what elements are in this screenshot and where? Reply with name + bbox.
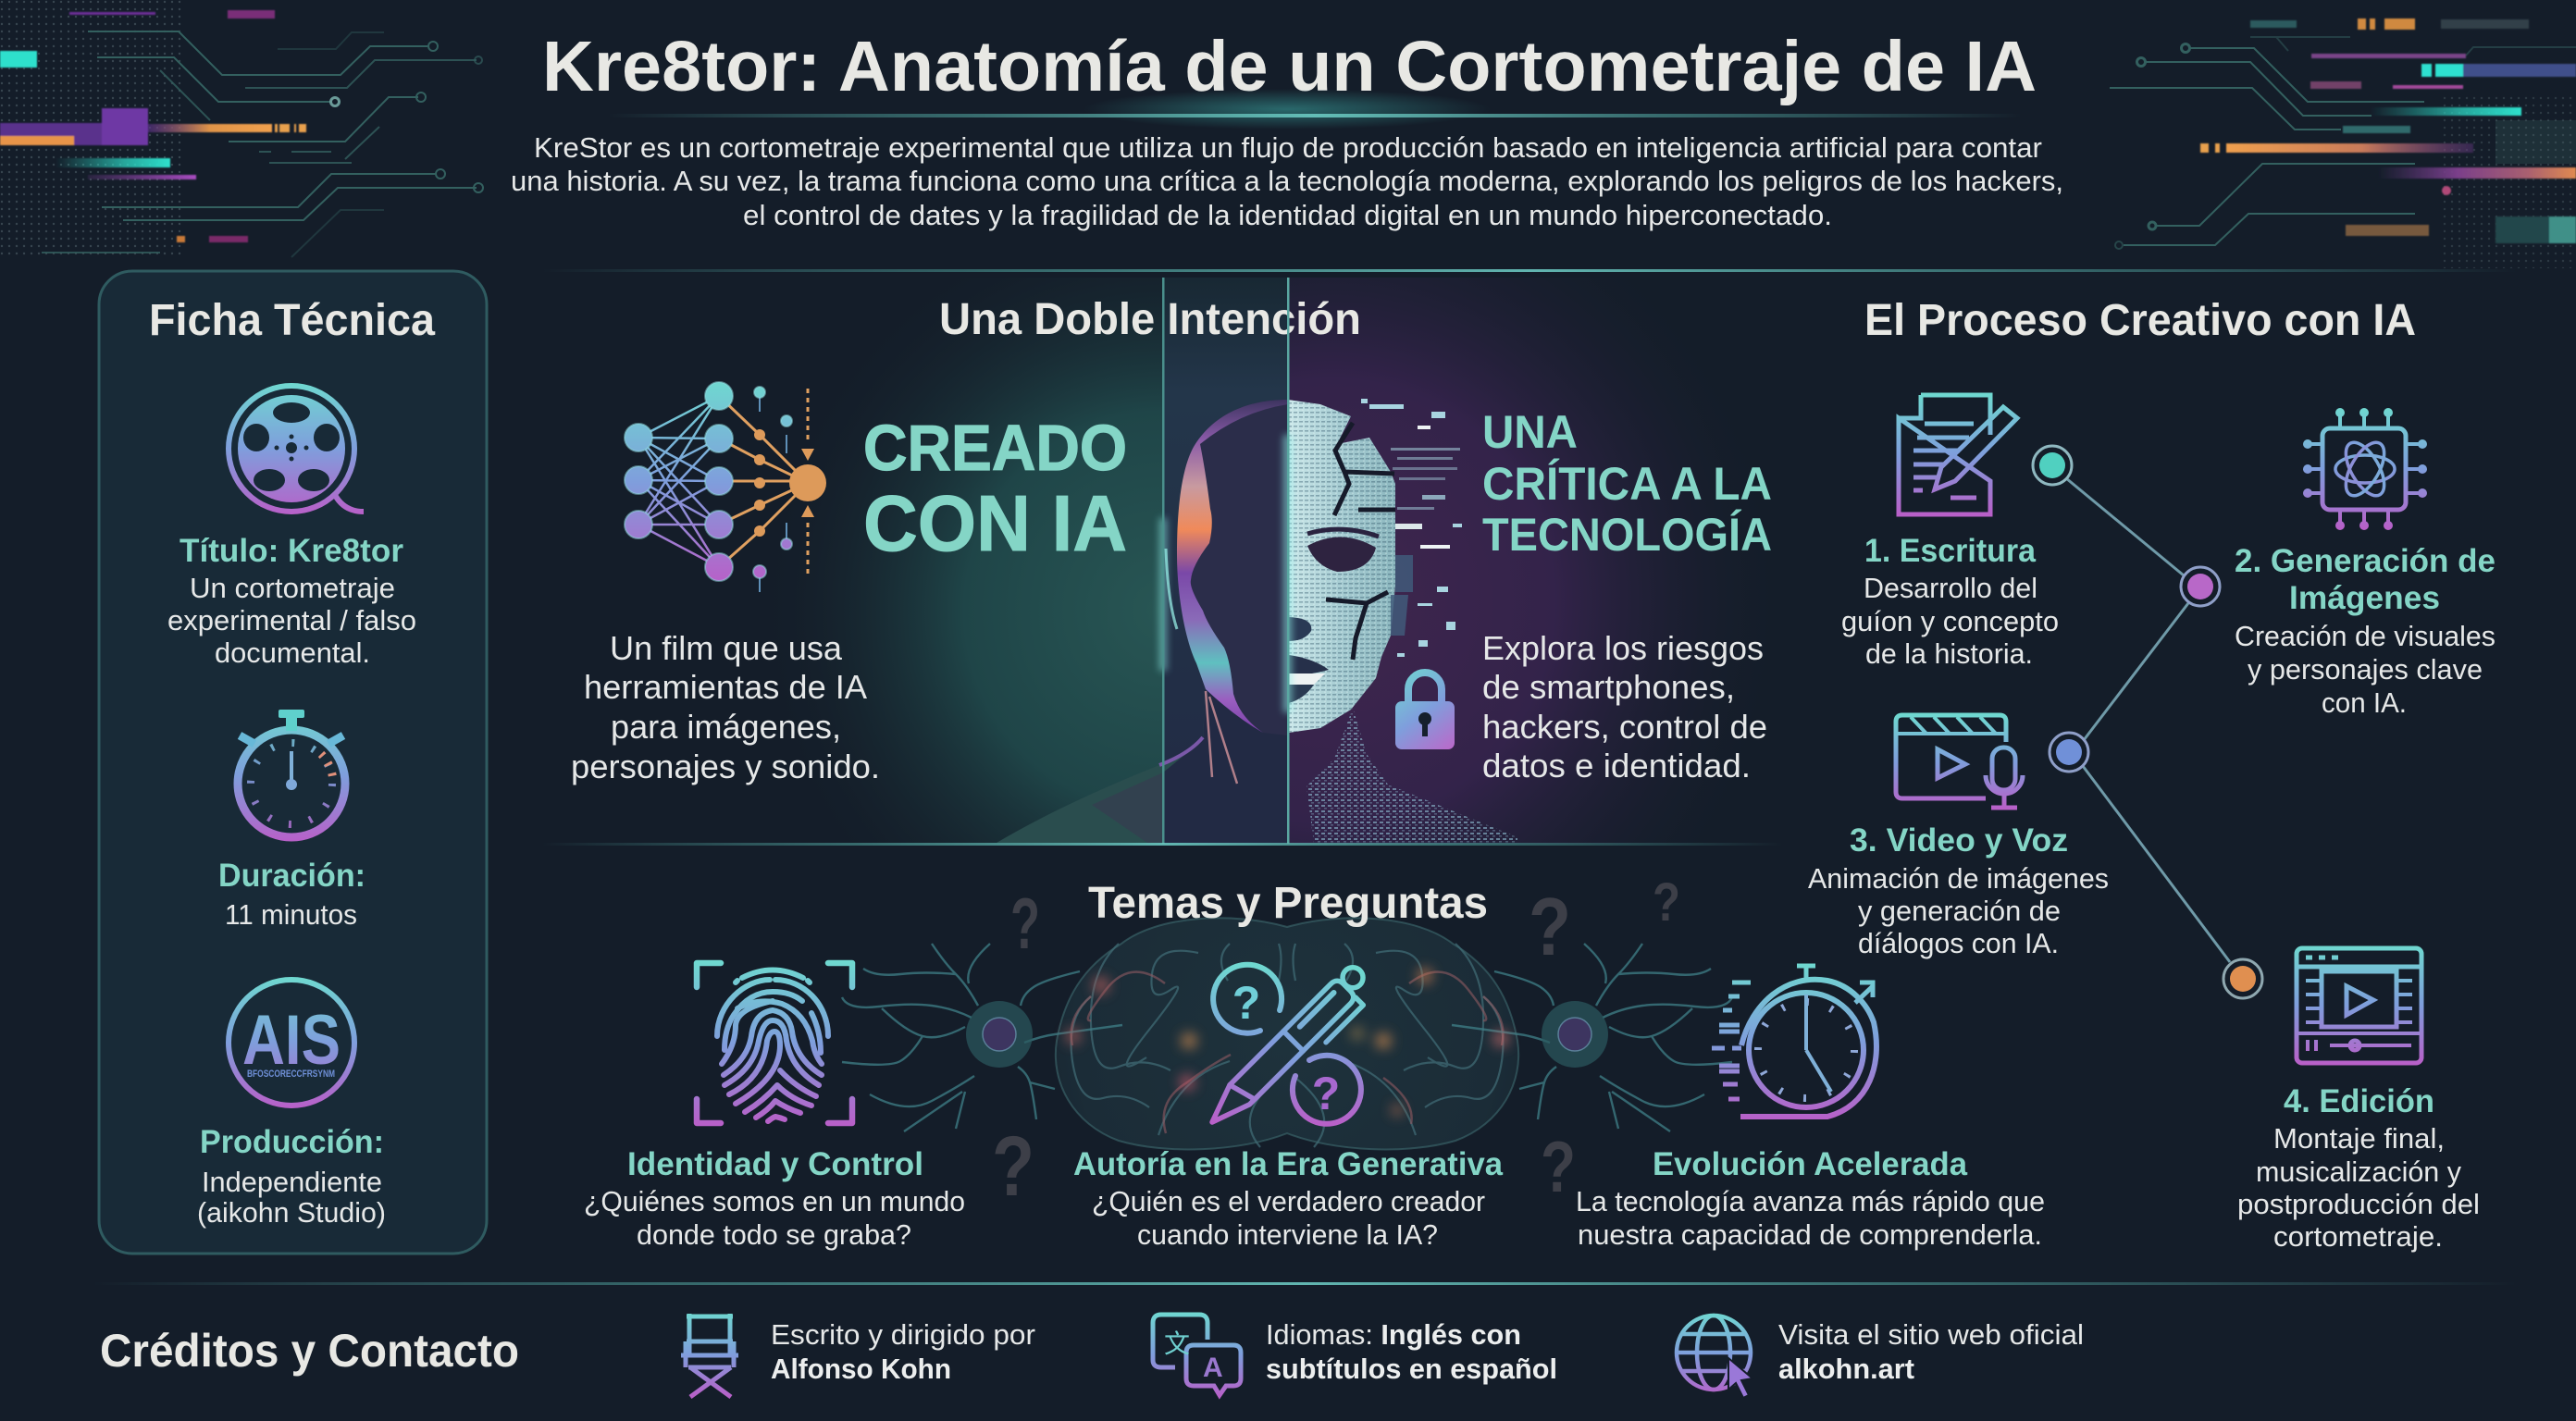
step 3: video y voz <box>1808 822 2109 959</box>
icon: studio logo: BFOSCORECCFRSYNM <box>247 1069 335 1080</box>
intro paragraph: el control de dates y la fragilidad de la identidad digital en un mundo hiperconectado. <box>743 200 1832 231</box>
circuit decoration: top right <box>2110 19 2576 268</box>
icon: stopwatch <box>238 710 345 837</box>
text: left description: personajes y sonido. <box>571 748 880 785</box>
text: left description: Un film que usa <box>610 629 843 667</box>
credit: writer and director: Escrito y dirigido por <box>771 1318 1035 1351</box>
step 2: generación de imágenes: Creación de visuales <box>2235 620 2496 652</box>
theme: identidad y control <box>584 1146 965 1251</box>
panel: créditos y contacto <box>100 1314 2084 1398</box>
icon: director chair <box>681 1314 738 1397</box>
theme: evolución acelerada <box>1576 1146 2045 1251</box>
text: right description: de smartphones, <box>1482 668 1735 706</box>
field: duración: 11 minutos <box>225 898 357 931</box>
credit: website <box>1778 1318 2084 1385</box>
text: left description: herramientas de IA <box>584 668 867 706</box>
heading: ficha técnica: Ficha Técnica <box>149 296 435 345</box>
text: right description <box>1482 629 1767 785</box>
field: duración <box>218 858 365 931</box>
icon: video editor <box>2297 948 2421 1063</box>
step 1: escritura: Desarrollo del <box>1864 572 2037 604</box>
step 1: escritura: de la historia. <box>1865 637 2033 670</box>
step 3: video y voz: díálogos con IA. <box>1858 927 2059 959</box>
label: una crítica a la tecnología <box>1482 406 1772 561</box>
field: título <box>167 533 416 669</box>
step 2: generación de imágenes: con IA. <box>2322 686 2407 719</box>
label: una crítica a la tecnología: UNA <box>1482 406 1578 458</box>
label: una crítica a la tecnología: CRÍTICA A LA <box>1482 458 1772 510</box>
step 3: video y voz: y generación de <box>1858 895 2061 927</box>
right neck data texture <box>1307 708 1517 844</box>
icon: neural network <box>625 382 826 592</box>
credit: languages: subtítulos en español <box>1266 1353 1557 1385</box>
step 4: edición: cortometraje. <box>2273 1220 2443 1253</box>
icon: translate bubbles <box>1153 1315 1241 1395</box>
icon: padlock <box>1395 673 1455 749</box>
icon: globe and cursor <box>1677 1316 1752 1398</box>
timeline connector <box>2033 446 2262 998</box>
step 4: edición: postproducción del <box>2237 1188 2480 1220</box>
intro paragraph: una historia. A su vez, la trama funciona como una crítica a la tecnología moderna, explorando los peligros de los hackers, <box>511 166 2063 197</box>
text: left description: para imágenes, <box>611 708 841 746</box>
field: producción: (aikohn Studio) <box>197 1196 386 1229</box>
question marks: ? <box>1653 872 1680 933</box>
icon: pen and question marks: ? <box>1312 1068 1340 1119</box>
icon: studio logo <box>229 980 354 1106</box>
heading: temas y preguntas: Temas y Preguntas <box>1088 879 1488 928</box>
right face <box>1288 400 1395 733</box>
step 2: generación de imágenes: Imágenes <box>2289 580 2440 616</box>
icon: translate bubbles: A <box>1203 1353 1223 1383</box>
backdrop: teal and purple halves <box>768 278 1769 844</box>
illustration: split face <box>997 399 1517 844</box>
step 3: video y voz: 3. Video y Voz <box>1850 822 2068 859</box>
heading: proceso creativo: El Proceso Creativo con IA <box>1864 296 2416 345</box>
field: título: Título: Kre8tor <box>180 533 403 569</box>
theme: autoría en la era generativa <box>1073 1146 1504 1251</box>
field: producción: Independiente <box>202 1166 382 1198</box>
intro paragraph <box>511 132 2063 231</box>
field: producción: Producción: <box>200 1124 384 1160</box>
background: brain and neurons <box>842 918 1732 1149</box>
step 4: edición: Montaje final, <box>2273 1122 2445 1155</box>
panel: ficha técnica <box>99 271 487 1254</box>
theme: identidad y control: donde todo se graba? <box>637 1218 911 1251</box>
icon: pen and question marks: ? <box>1232 977 1260 1029</box>
panel: temas y preguntas <box>584 872 2045 1251</box>
step 2: generación de imágenes: 2. Generación de <box>2235 543 2496 579</box>
credit: writer and director <box>771 1318 1035 1385</box>
data particles <box>1361 399 1462 657</box>
step 4: edición: musicalización y <box>2256 1155 2461 1188</box>
credit: languages <box>1266 1318 1557 1385</box>
icon: film reel <box>229 386 364 512</box>
field: producción <box>197 1124 386 1229</box>
field: duración: Duración: <box>218 858 365 894</box>
theme: autoría en la era generativa: Autoría en la Era Generativa <box>1073 1146 1504 1182</box>
label: creado con IA <box>863 412 1127 568</box>
credit: website: alkohn.art <box>1778 1353 1914 1385</box>
theme: identidad y control: Identidad y Control <box>627 1146 923 1182</box>
field: título: documental. <box>215 636 370 669</box>
left head <box>1177 400 1288 735</box>
text: right description: hackers, control de <box>1482 708 1767 746</box>
credit: writer and director: Alfonso Kohn <box>771 1353 951 1385</box>
text: left description <box>571 629 880 785</box>
icon: fingerprint <box>697 963 852 1123</box>
text: right description: Explora los riesgos <box>1482 629 1764 667</box>
theme: evolución acelerada: La tecnología avanza más rápido que <box>1576 1185 2045 1217</box>
heading: créditos: Créditos y Contacto <box>100 1325 519 1377</box>
title divider glow <box>608 89 2022 130</box>
question marks: ? <box>992 1119 1034 1214</box>
theme: autoría en la era generativa: ¿Quién es el verdadero creador <box>1092 1185 1485 1217</box>
step 4: edición <box>2237 1083 2480 1253</box>
credit: website: Visita el sitio web oficial <box>1778 1318 2084 1351</box>
title: Kre8tor: Anatomía de un Cortometraje de IA <box>542 27 2037 106</box>
theme: evolución acelerada: Evolución Acelerada <box>1653 1146 1968 1182</box>
step 2: generación de imágenes: y personajes clave <box>2248 653 2483 686</box>
theme: identidad y control: ¿Quiénes somos en un mundo <box>584 1185 965 1217</box>
icon: pen and question marks <box>1202 962 1379 1139</box>
credit: languages: Idiomas: Inglés con <box>1266 1318 1521 1351</box>
icon: document and pencil <box>1899 395 2017 514</box>
icon: studio logo: AIS <box>242 1001 341 1080</box>
question marks: ? <box>1541 1126 1576 1207</box>
field: título: experimental / falso <box>167 604 416 636</box>
panel: una doble intención <box>571 278 1772 844</box>
icon: clapper and microphone <box>1896 715 2023 808</box>
circuit decoration: top left <box>0 0 483 259</box>
label: creado con IA: CREADO <box>863 412 1127 484</box>
left shoulder <box>997 689 1288 843</box>
step 2: generación de imágenes <box>2235 543 2496 719</box>
theme: evolución acelerada: nuestra capacidad de comprenderla. <box>1578 1218 2042 1251</box>
theme: autoría en la era generativa: cuando interviene la IA? <box>1137 1218 1438 1251</box>
label: una crítica a la tecnología: TECNOLOGÍA <box>1482 509 1772 561</box>
icon: speeding stopwatch <box>1712 966 1876 1117</box>
step 1: escritura: guíon y concepto <box>1841 605 2059 637</box>
text: right description: datos e identidad. <box>1482 747 1751 785</box>
icon: translate bubbles: 文 <box>1164 1329 1190 1358</box>
step 3: video y voz: Animación de imágenes <box>1808 862 2109 895</box>
field: título: Un cortometraje <box>190 572 395 604</box>
intro paragraph: KreStor es un cortometraje experimental que utiliza un flujo de producción basado en inteligencia artificial para contar <box>534 132 2042 164</box>
glow lines <box>1159 278 1292 844</box>
question marks <box>992 872 1680 1214</box>
panel: el proceso creativo con IA <box>1808 296 2496 1253</box>
label: creado con IA: CON IA <box>863 480 1127 568</box>
step 1: escritura: 1. Escritura <box>1864 533 2037 569</box>
icon: AI chip <box>2303 408 2427 530</box>
question marks: ? <box>1010 883 1040 964</box>
step 1: escritura <box>1841 533 2059 670</box>
step 4: edición: 4. Edición <box>2284 1083 2434 1119</box>
heading: una doble intención: Una Doble Intención <box>939 295 1361 344</box>
question marks: ? <box>1529 881 1571 972</box>
